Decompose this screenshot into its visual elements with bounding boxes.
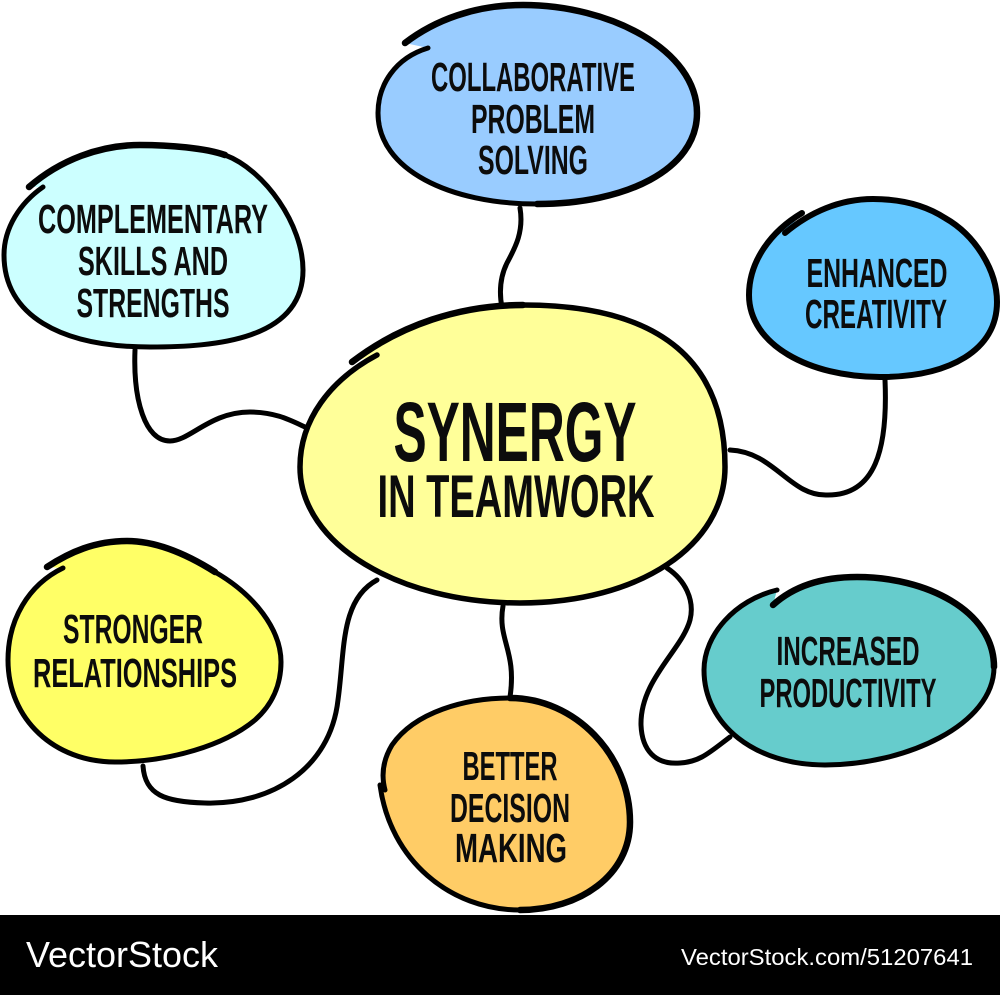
footer bar [0, 915, 1000, 995]
bubble: collaborative problem solving: PROBLEM [471, 96, 595, 142]
bubble: complementary skills and strengths [4, 145, 303, 347]
central bubble: synergy in teamwork [300, 305, 725, 603]
bubble: increased productivity [704, 577, 994, 765]
bubble: better decision making: MAKING [455, 825, 567, 871]
bubble: collaborative problem solving: SOLVING [478, 137, 588, 183]
bubble: better decision making [380, 698, 630, 910]
bubble: complementary skills and strengths: STRENGTHS [76, 280, 230, 326]
bubble: better decision making: BETTER [462, 743, 558, 789]
bubble: stronger relationships: STRONGER [63, 606, 203, 652]
footer bar: VectorStock.com/51207641 [681, 944, 973, 970]
bubble: complementary skills and strengths: SKILLS AND [78, 238, 228, 284]
bubble: collaborative problem solving: COLLABORATIVE [431, 54, 635, 100]
bubble: stronger relationships: RELATIONSHIPS [33, 650, 237, 696]
central bubble: synergy in teamwork: IN TEAMWORK [378, 463, 654, 530]
central bubble: synergy in teamwork: SYNERGY [394, 385, 636, 479]
bubble: collaborative problem solving [378, 5, 697, 204]
bubble: stronger relationships [8, 541, 281, 762]
bubble: complementary skills and strengths: COMPLEMENTARY [38, 196, 268, 242]
bubble: enhanced creativity [749, 199, 997, 377]
connectors [135, 208, 885, 803]
bubble: better decision making: DECISION [450, 785, 570, 831]
footer bar: VectorStock [26, 934, 219, 975]
